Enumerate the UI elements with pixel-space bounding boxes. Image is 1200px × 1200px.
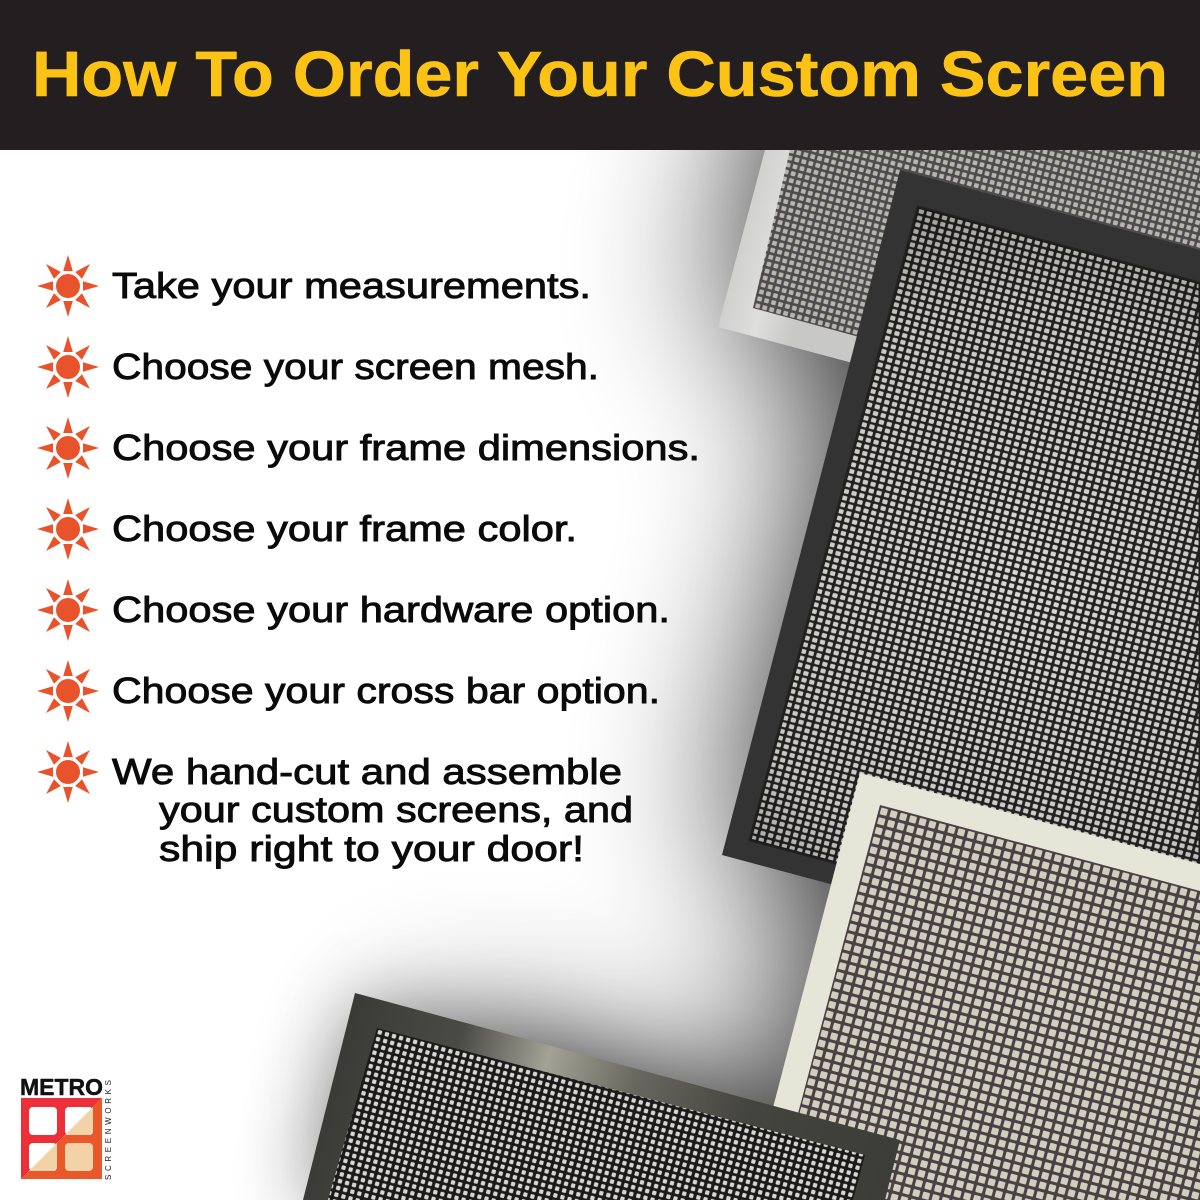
step 5 [37,579,670,641]
title: How To Order Your Custom Screen [32,38,1168,110]
step 2 [37,336,599,398]
logo: Metro Screenworks: SCREENWORKS [104,1080,113,1180]
logo: Metro Screenworks: METRO [20,1074,103,1100]
photo: bronze-frame screen [303,993,900,1200]
step 1 [37,255,591,317]
soft shadow behind screens [305,0,1200,1200]
step 3: Choose your frame dimensions. [112,427,700,468]
step 2: Choose your screen mesh. [112,346,599,387]
step 4: Choose your frame color. [112,508,577,549]
step 7: your custom screens, and [159,789,633,830]
step 5: Choose your hardware option. [112,589,670,630]
logo: Metro Screenworks [20,1074,113,1180]
step 4 [37,498,577,560]
photo: black-frame screen [722,170,1200,983]
step 6 [37,660,660,722]
header band [0,0,1200,150]
step 7 [37,741,633,869]
step 7: We hand-cut and assemble [112,751,622,792]
step 1: Take your measurements. [112,265,591,306]
photo: light-frame screen [718,150,1200,456]
step 3 [37,417,700,479]
photo: cream-frame screen [749,773,1200,1200]
step 6: Choose your cross bar option. [112,670,660,711]
step 7: ship right to your door! [159,828,584,869]
